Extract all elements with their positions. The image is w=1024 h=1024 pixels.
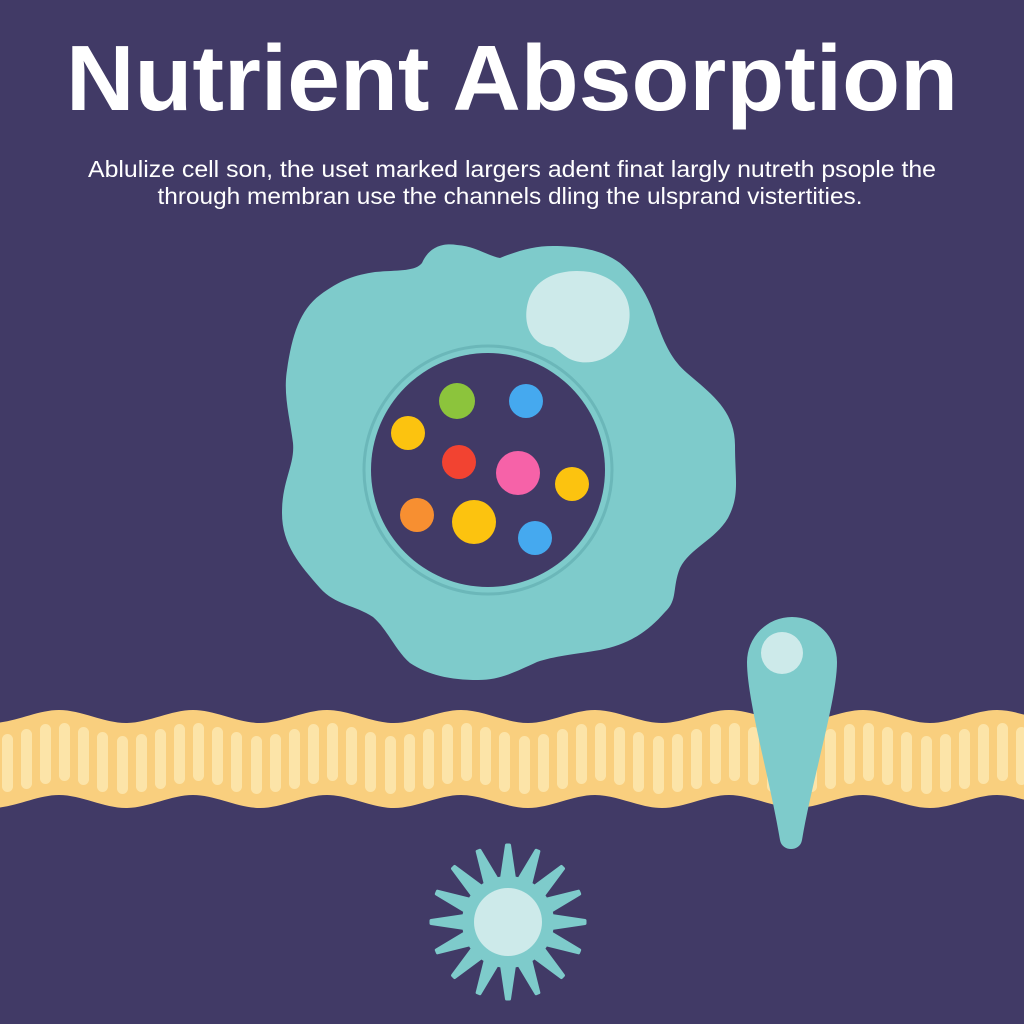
cell	[282, 244, 736, 680]
subtitle text: Ablulize cell son, the uset marked largers adent finat largly nutreth psople the	[88, 156, 936, 182]
subtitle text	[88, 156, 936, 209]
title: Nutrient Absorption	[66, 26, 958, 130]
highlight vacuole	[526, 271, 630, 362]
nucleus	[364, 346, 612, 594]
icon: channel droplet	[747, 617, 837, 849]
nutrient particles	[391, 383, 589, 555]
subtitle text: through membran use the channels dling the ulsprand vistertities.	[158, 183, 862, 209]
icon: spiky particle	[431, 845, 585, 999]
membrane	[0, 710, 1024, 808]
cell body	[282, 244, 736, 680]
